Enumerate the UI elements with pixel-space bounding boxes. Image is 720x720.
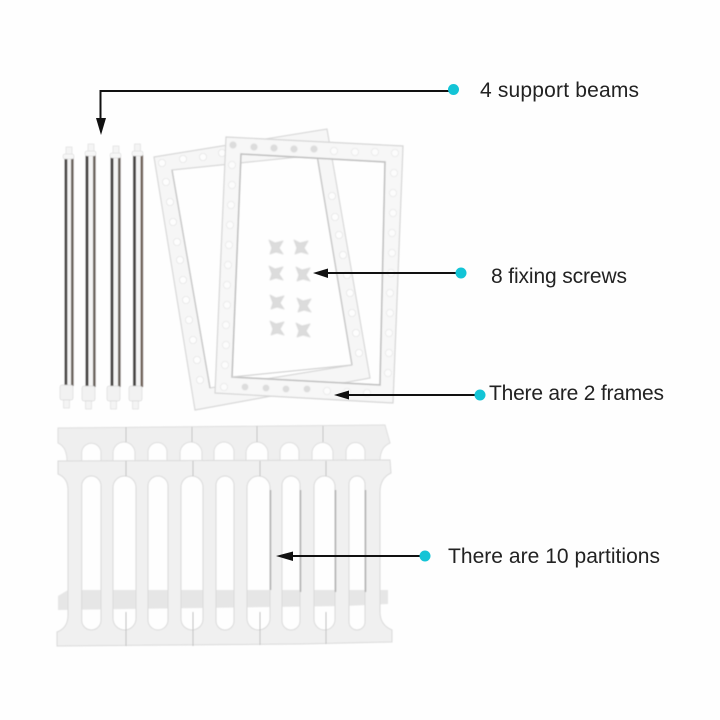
callout: 2 frames	[334, 382, 664, 405]
support beams: four rods	[60, 144, 144, 409]
label: 4 support beams	[480, 79, 639, 102]
screw 3	[269, 266, 283, 280]
screw 8	[296, 323, 310, 337]
frames: two overlapping panels	[154, 129, 403, 410]
partitions: stacked white panels	[57, 425, 392, 646]
callout: 4 support beams	[96, 79, 639, 135]
back row of partitions	[58, 425, 390, 475]
label: There are 10 partitions	[448, 545, 660, 568]
rod 3	[107, 146, 121, 409]
arrow to screws	[313, 268, 461, 278]
dot	[474, 390, 486, 400]
label: 8 fixing screws	[491, 265, 627, 288]
rod 1	[60, 147, 74, 408]
arrow to partitions	[276, 552, 425, 561]
screw 4	[296, 267, 310, 281]
callout: 8 fixing screws	[313, 265, 627, 288]
screw 6	[297, 298, 311, 312]
fixing screws: eight small pieces	[269, 240, 311, 337]
front row of partitions	[57, 460, 392, 646]
arrow to beams	[96, 91, 454, 135]
screw 7	[270, 321, 284, 335]
front frame	[215, 137, 403, 403]
label: There are 2 frames	[489, 382, 664, 405]
rod 4	[129, 144, 144, 409]
rod 2	[82, 144, 96, 409]
screw 1	[269, 240, 283, 254]
callout: 10 partitions	[276, 545, 660, 568]
back frame	[154, 129, 370, 410]
dot	[420, 550, 430, 562]
screw 2	[294, 240, 308, 254]
dot	[456, 268, 466, 278]
dot	[448, 84, 459, 95]
shaded rear cross bar	[58, 590, 388, 610]
screw 5	[270, 295, 284, 309]
arrow to frames	[334, 390, 480, 400]
